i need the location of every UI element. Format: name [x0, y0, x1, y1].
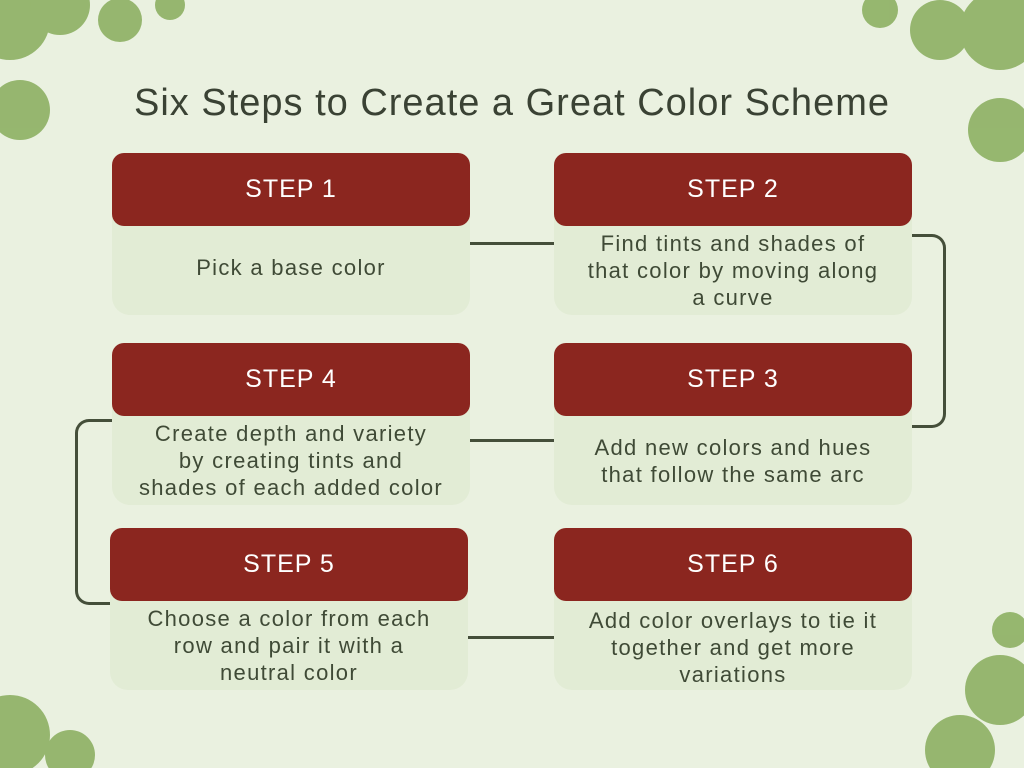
- connector: step4 to step5 bracket: [75, 419, 116, 605]
- card: step 5: [110, 528, 468, 690]
- card: step 2: STEP 2: [687, 175, 779, 203]
- card: step 1: Pick a base color: [196, 255, 386, 280]
- card: step 5: row and pair it with a: [174, 633, 404, 658]
- card: step 6: [554, 528, 912, 690]
- card: step 3: [554, 343, 912, 505]
- card: step 2: a curve: [692, 285, 774, 310]
- card: step 4: shades of each added color: [139, 475, 443, 500]
- card: step 6: STEP 6: [687, 550, 779, 578]
- card: step 4: by creating tints and: [179, 448, 403, 473]
- card: step 1: STEP 1: [245, 175, 337, 203]
- connector: step3 to step4: [470, 439, 554, 442]
- connector: step1 to step2: [470, 242, 554, 245]
- card: step 2: that color by moving along: [588, 258, 878, 283]
- title: Six Steps to Create a Great Color Scheme: [134, 82, 890, 124]
- card: step 4: Create depth and variety: [155, 421, 427, 446]
- card: step 5: neutral color: [220, 660, 358, 685]
- card: step 2: Find tints and shades of: [601, 231, 865, 256]
- card: step 5: STEP 5: [243, 550, 335, 578]
- card: step 1: [112, 153, 470, 315]
- card: step 3: that follow the same arc: [601, 462, 865, 486]
- card: step 4: STEP 4: [245, 365, 337, 393]
- card: step 2: [554, 153, 912, 315]
- card: step 4: [112, 343, 470, 505]
- card: step 5: Choose a color from each: [147, 606, 431, 631]
- card: step 6: together and get more: [611, 635, 855, 660]
- connector: step5 to step6: [468, 636, 554, 639]
- card: step 3: STEP 3: [687, 365, 779, 393]
- card: step 3: Add new colors and hues: [595, 434, 871, 460]
- card: step 6: variations: [679, 662, 787, 687]
- connector: step2 to step3 bracket: [905, 234, 946, 428]
- card: step 6: Add color overlays to tie it: [589, 608, 877, 633]
